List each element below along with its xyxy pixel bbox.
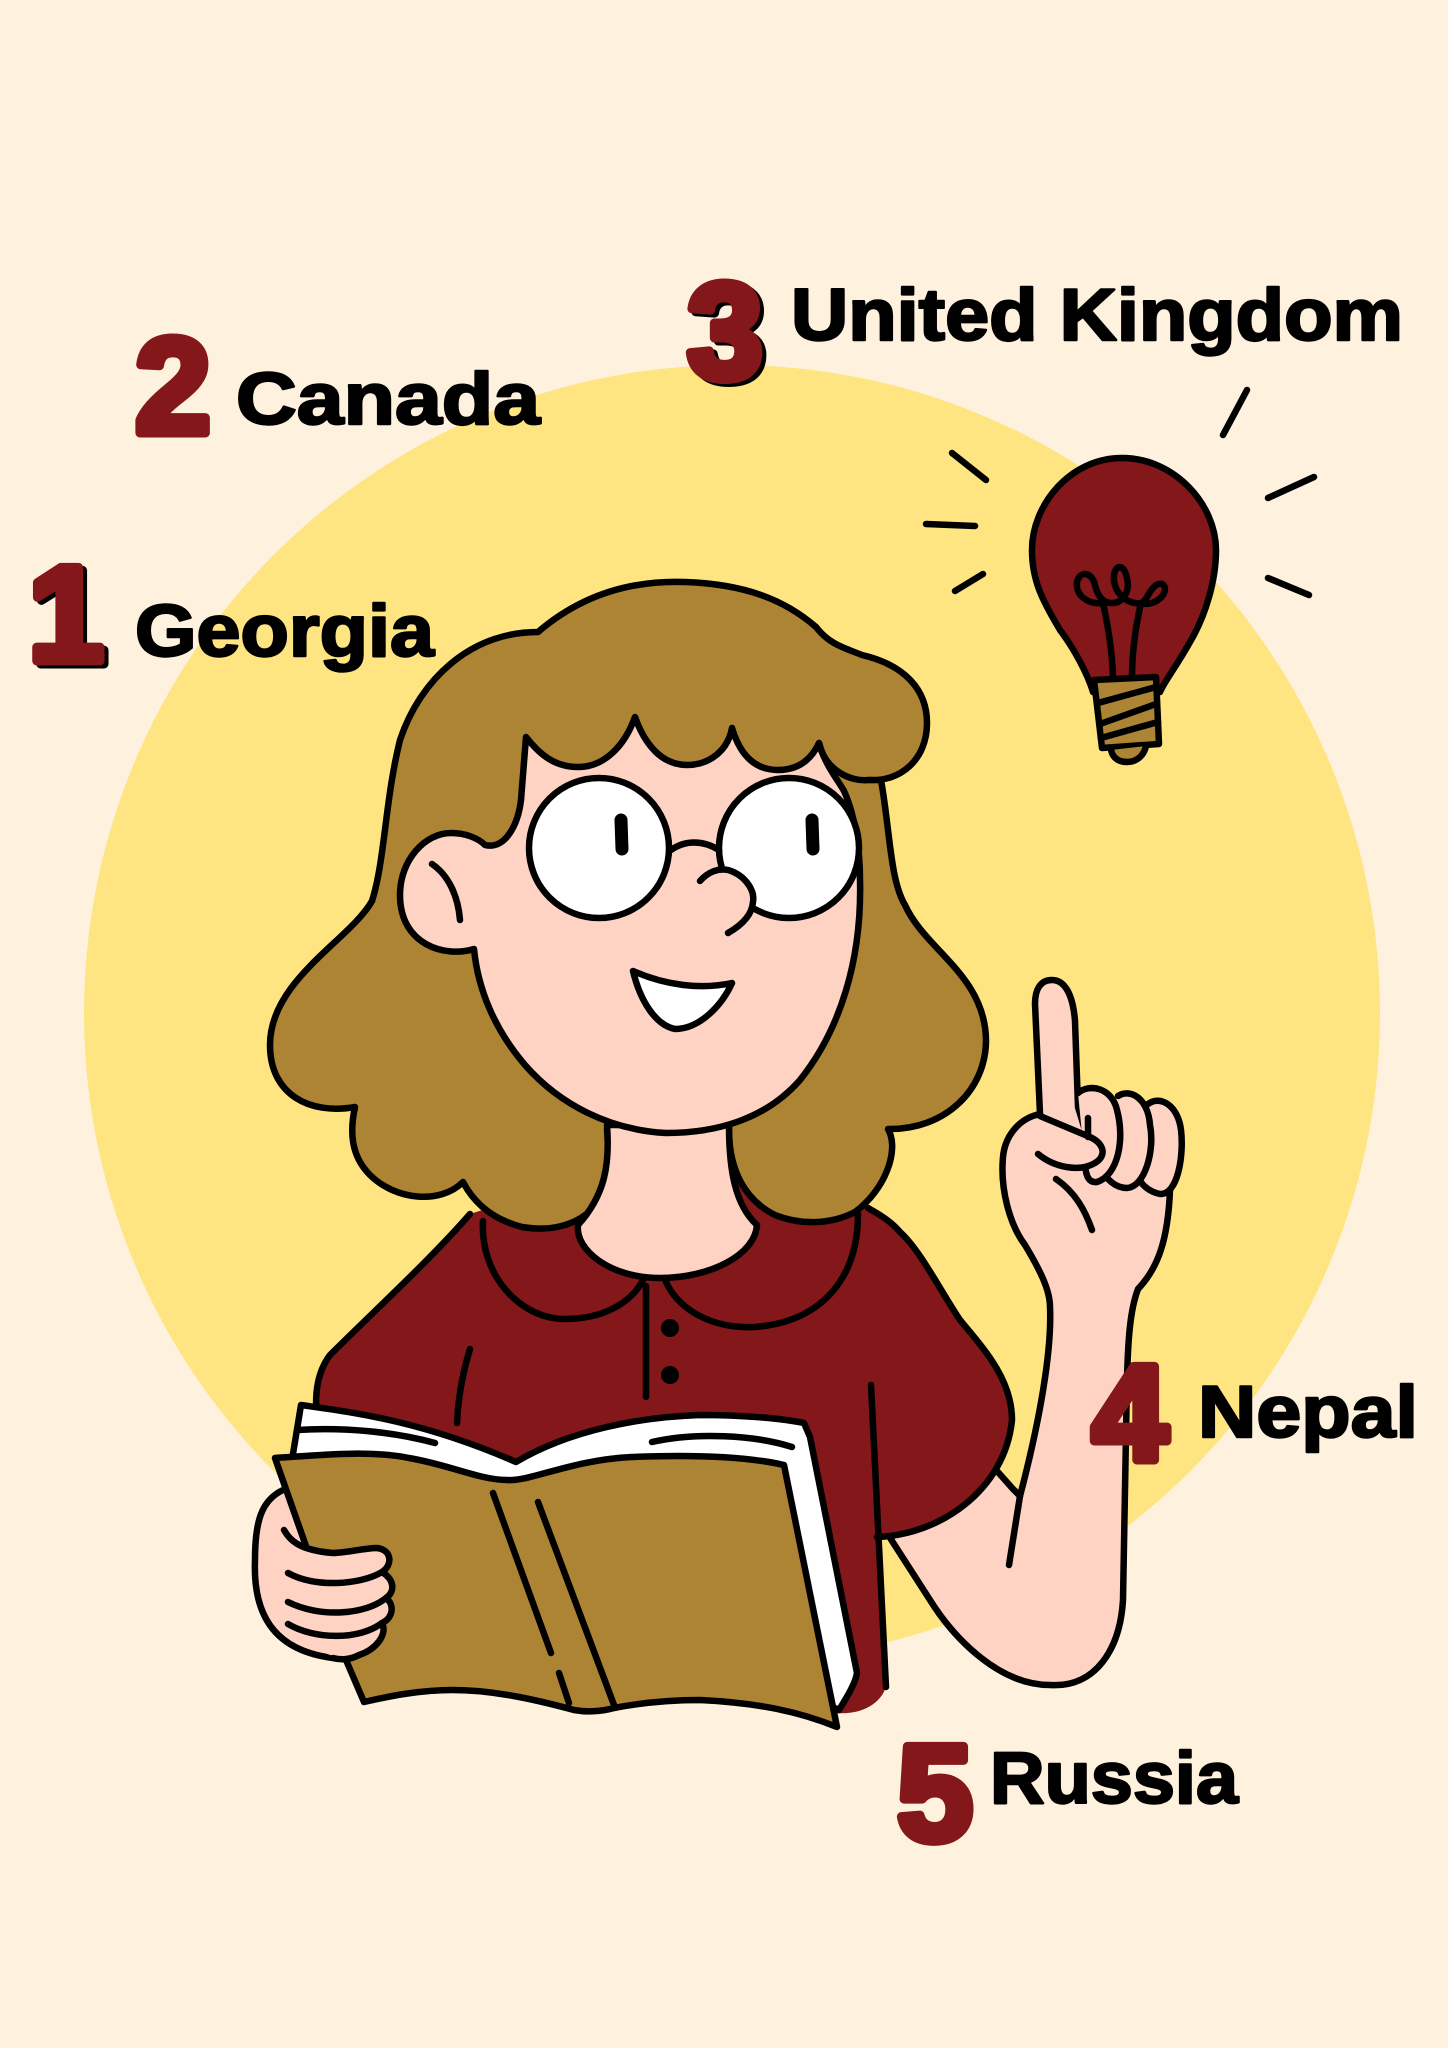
finger lines bbox=[284, 1530, 392, 1659]
shirt buttons bbox=[661, 1319, 679, 1384]
item 4: Nepal bbox=[1092, 1337, 1418, 1489]
middle finger bbox=[1078, 1088, 1120, 1182]
number 3: 3 bbox=[691, 258, 767, 410]
glasses bbox=[529, 778, 859, 918]
inner arm line bbox=[1009, 1496, 1020, 1565]
item 3: United Kingdom bbox=[687, 255, 1403, 410]
filament bbox=[1077, 567, 1165, 677]
label Georgia: Georgia bbox=[135, 591, 436, 672]
number 3: 3 bbox=[687, 255, 763, 407]
hair bbox=[270, 582, 986, 1229]
bulb glass bbox=[1032, 458, 1216, 692]
spine lines bbox=[493, 1493, 614, 1705]
shirt outline bbox=[316, 1208, 1012, 1687]
shirt creases bbox=[457, 1286, 646, 1423]
neck bbox=[578, 1125, 757, 1278]
number 2: 2 bbox=[135, 310, 211, 462]
ring finger bbox=[1103, 1093, 1151, 1188]
fingers holding book bbox=[270, 1530, 392, 1659]
label Canada: Canada bbox=[236, 359, 542, 440]
yellow background circle bbox=[84, 365, 1380, 1661]
raised arm and pointing hand bbox=[885, 980, 1182, 1685]
open book bbox=[275, 1405, 857, 1727]
icon: idea rays bbox=[926, 390, 1314, 595]
bridge bbox=[671, 842, 719, 850]
shirt body bbox=[316, 1150, 1012, 1713]
arm and palm bbox=[885, 980, 1170, 1685]
right lens bbox=[719, 778, 859, 918]
bulb tip bbox=[1111, 746, 1146, 762]
collar bbox=[483, 1214, 858, 1327]
pages bbox=[292, 1405, 857, 1710]
ear inner line bbox=[432, 864, 460, 920]
label United Kingdom: United Kingdom bbox=[791, 275, 1403, 356]
shirt bbox=[316, 1150, 1012, 1713]
base thread lines bbox=[1098, 687, 1158, 738]
number 1: 1 bbox=[32, 541, 108, 693]
smile bbox=[633, 971, 732, 1029]
item 2: Canada bbox=[135, 310, 542, 462]
item 5: Russia bbox=[897, 1717, 1239, 1869]
palm creases bbox=[1056, 1118, 1092, 1230]
book cover bbox=[275, 1454, 837, 1727]
hair curl over forehead bbox=[819, 743, 869, 780]
pupils bbox=[621, 820, 813, 849]
character: woman with book bbox=[255, 582, 1182, 1727]
little finger bbox=[1138, 1101, 1182, 1194]
label Nepal: Nepal bbox=[1198, 1372, 1418, 1453]
page lines bbox=[297, 1429, 792, 1447]
left hand behind book bbox=[255, 1490, 380, 1658]
number 4: 4 bbox=[1092, 1337, 1168, 1489]
icon: light bulb idea bbox=[1032, 458, 1216, 762]
left lens bbox=[529, 778, 669, 918]
thumb bbox=[1038, 1116, 1103, 1168]
number 5: 5 bbox=[897, 1717, 973, 1869]
finger fill bbox=[270, 1530, 392, 1659]
face and ear bbox=[400, 717, 860, 1133]
label Russia: Russia bbox=[990, 1738, 1239, 1819]
item 1: Georgia bbox=[28, 538, 436, 693]
bulb base bbox=[1094, 677, 1159, 748]
number 1: 1 bbox=[28, 538, 104, 690]
nose bbox=[700, 869, 753, 933]
